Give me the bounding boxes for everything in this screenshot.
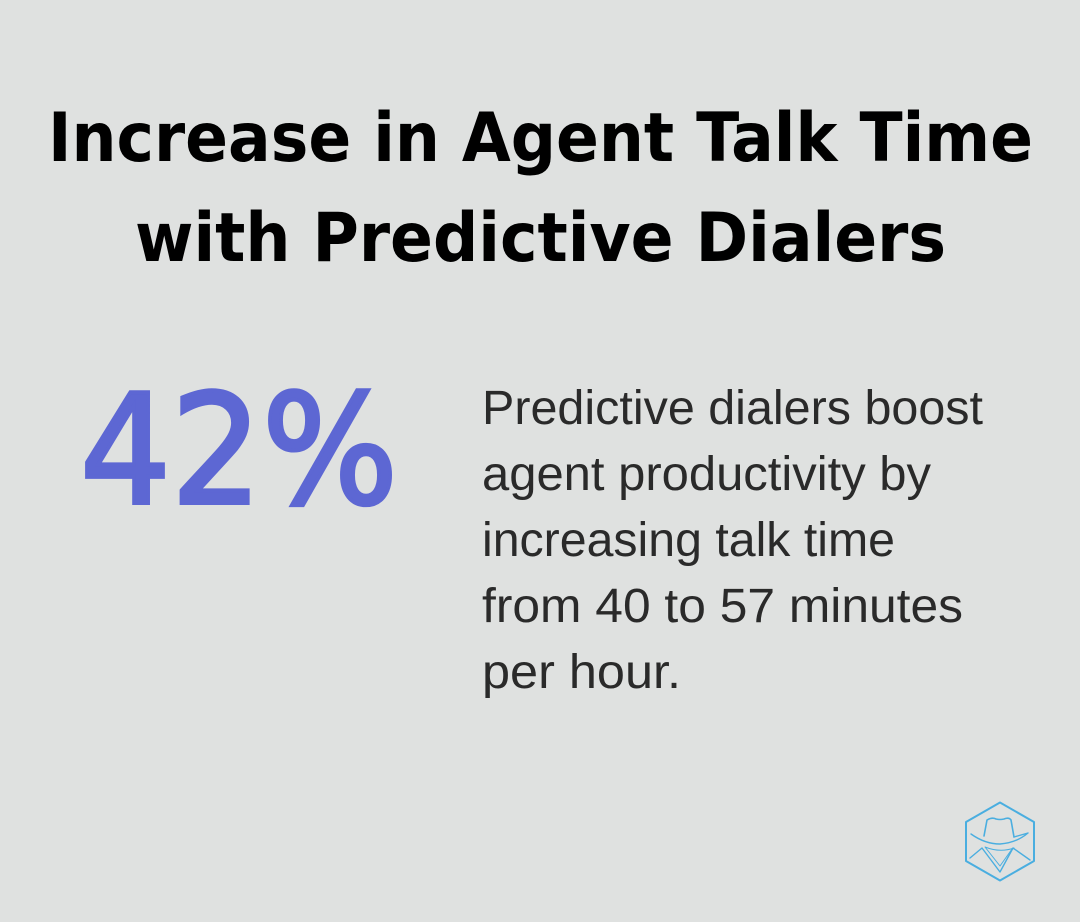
icon: hexagon logo with spy hat — [966, 802, 1034, 880]
description text: Predictive dialers boost — [482, 382, 983, 435]
description text — [482, 382, 983, 699]
statistic: 42%: 42% — [80, 362, 398, 539]
title: with Predictive Dialers — [135, 199, 946, 278]
title: Increase in Agent Talk Time — [48, 99, 1033, 178]
title — [48, 99, 1033, 278]
description text: per hour. — [482, 646, 681, 699]
description text: increasing talk time — [482, 514, 895, 567]
description text: agent productivity by — [482, 448, 931, 501]
description text: from 40 to 57 minutes — [482, 580, 963, 633]
